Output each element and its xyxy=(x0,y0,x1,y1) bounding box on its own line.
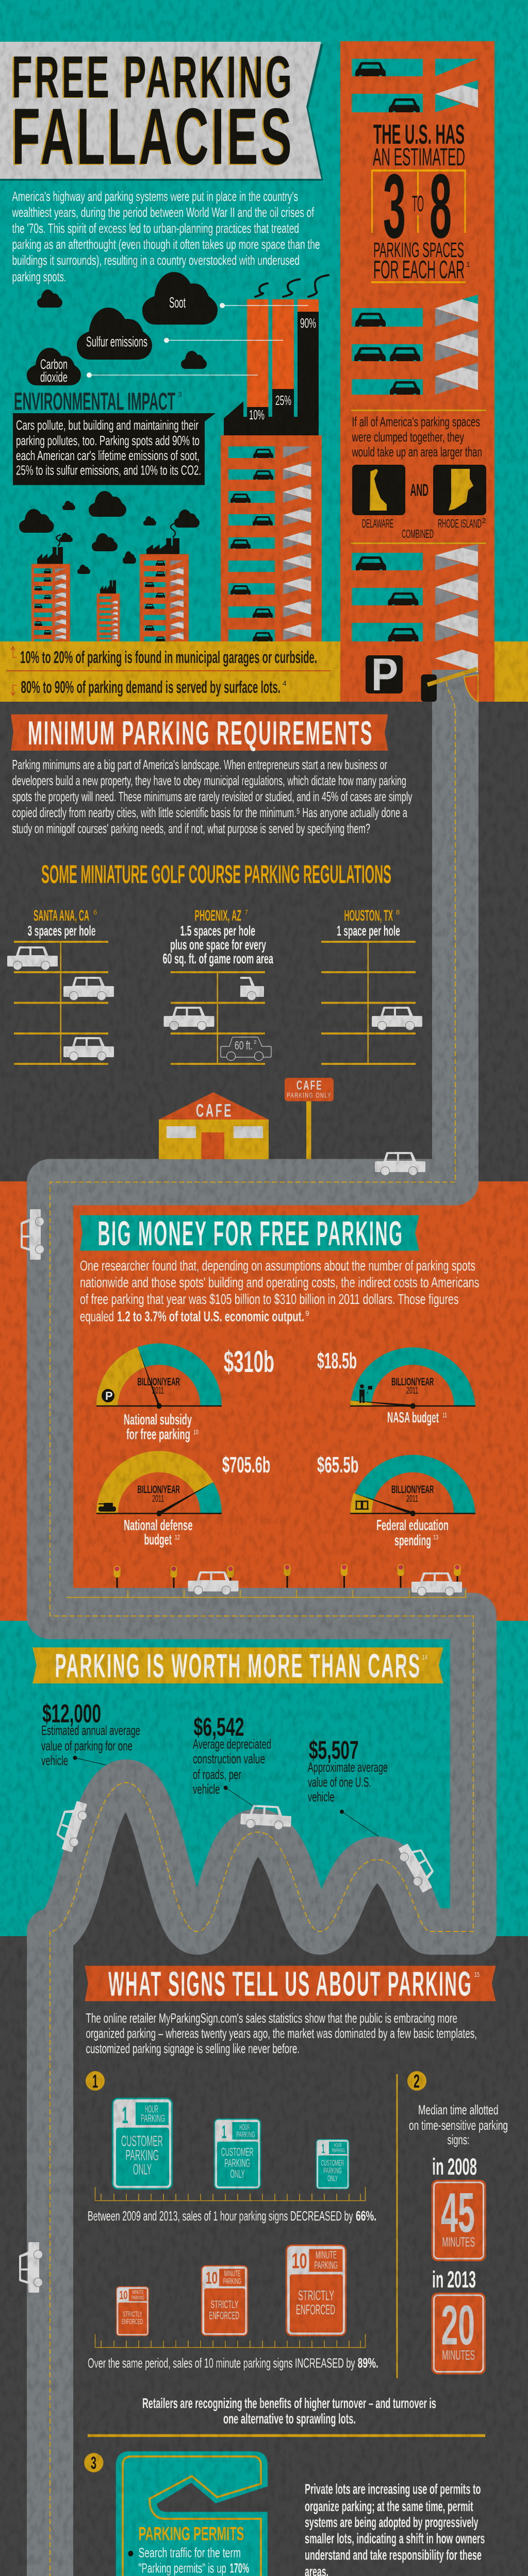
sign: 10 minute medium xyxy=(201,2265,248,2336)
sign: 10 minute large: 10 xyxy=(292,2248,307,2273)
sign: 1 hour medium: PARKING xyxy=(236,2130,255,2139)
gauge: national subsidy for free parking: for free parking xyxy=(126,1426,190,1443)
sign: 10 minute large xyxy=(286,2244,346,2336)
sign: 10 minute medium: ENFORCED xyxy=(209,2310,239,2321)
sign: 1 hour small: PARKING xyxy=(332,2148,345,2154)
panel: Phoenix regulation: 1.5 spaces per hole xyxy=(180,923,255,939)
stack: soot 90% xyxy=(298,299,319,435)
sign: 10 minute small: MINUTE xyxy=(132,2290,144,2296)
panel: Phoenix regulation: plus one space for every xyxy=(170,937,266,953)
sign: 1 hour small: 1 xyxy=(321,2142,325,2156)
heading: environmental impact xyxy=(14,388,182,415)
number badge 3 xyxy=(84,2453,103,2473)
text: state labels: AND xyxy=(410,480,428,500)
text: state labels: RHODE ISLAND xyxy=(438,517,482,530)
sign: 10 minute large: ENFORCED xyxy=(296,2302,335,2317)
cloud: carbon dioxide: Carbon xyxy=(40,357,68,372)
icon: outlined car 60 sq ft: 2 xyxy=(254,1040,257,1045)
illustration: cafe xyxy=(159,1078,334,1159)
number badge 1: 1 xyxy=(92,2071,98,2092)
text: area comparison xyxy=(352,414,482,460)
stat: 3 to 8 parking spaces: 8 xyxy=(430,155,452,257)
gauge: NASA budget: $18.5b xyxy=(317,1348,357,1374)
text: 1 hour signs decreased: 66%. xyxy=(356,2208,376,2224)
panel: large parking tower with stat xyxy=(340,41,494,702)
parking gate xyxy=(421,650,478,702)
title banner: FREE PARKING xyxy=(12,44,294,110)
text: 10 minute signs increased: 89%. xyxy=(358,2355,378,2371)
text: big money xyxy=(80,1258,480,1324)
text: big money: 9 xyxy=(305,1309,309,1317)
panel: parking permits hang tag: Search traffic for the term xyxy=(138,2545,241,2561)
sign: 1 hour small: ONLY xyxy=(327,2175,338,2183)
clouds with labels xyxy=(19,272,308,574)
gauge: national subsidy for free parking: 2011 xyxy=(152,1385,164,1396)
text: state labels: 2 xyxy=(482,517,486,524)
gauge: NASA budget: NASA budget xyxy=(387,1410,439,1426)
sign: 1 hour large: HOUR xyxy=(145,2104,158,2115)
sign: 1 hour large: 1 xyxy=(122,2102,128,2128)
panel: parking permits hang tag xyxy=(116,2451,268,2576)
icon: book xyxy=(355,1501,369,1509)
panel: Houston regulation: 8 xyxy=(396,908,400,916)
icon: car driving on left road xyxy=(21,1209,44,1260)
lot lines xyxy=(67,1590,467,1597)
sign: 45 minutes: MINUTES xyxy=(442,2234,475,2249)
gauge: federal education spending: 13 xyxy=(433,1533,438,1541)
sign: 1 hour medium: 1 xyxy=(222,2122,226,2142)
number badge 2: 2 xyxy=(414,2071,420,2092)
parking grid xyxy=(171,971,265,1065)
sign: 10 minute small: 10 xyxy=(119,2289,128,2302)
leader lines xyxy=(87,303,308,378)
stat: road value: Average depreciated xyxy=(193,1736,271,1752)
divider column xyxy=(396,2074,398,2378)
gauge: national subsidy for free parking: $310b xyxy=(224,1345,274,1379)
text: parking minimums xyxy=(12,757,412,836)
divider xyxy=(351,410,486,411)
gauge: NASA budget: 11 xyxy=(442,1411,447,1419)
heading: environmental impact: ENVIRONMENTAL IMPACT xyxy=(14,388,175,415)
icon: parking xyxy=(102,1389,114,1402)
gauge: federal education spending: Federal education xyxy=(376,1517,449,1534)
stat: 3 to 8 parking spaces: 1 xyxy=(466,260,470,268)
sign: 10 minute medium: 10 xyxy=(206,2268,218,2287)
panel: Houston regulation: HOUSTON, TX xyxy=(344,907,393,924)
cafe sign xyxy=(285,1078,334,1159)
gauge: national defense budget: 2011 xyxy=(152,1494,164,1504)
icon: down arrow xyxy=(11,685,17,696)
icon: car xyxy=(164,1007,214,1030)
windows xyxy=(352,59,478,641)
sign: 1 hour medium: CUSTOMER xyxy=(221,2146,254,2159)
sign: 1 hour large: PARKING xyxy=(141,2113,165,2125)
sign: 10 minute large: STRICTLY xyxy=(298,2287,334,2303)
gauge: federal education spending: BILLION/YEAR xyxy=(391,1484,434,1496)
title banner: FALLACIES xyxy=(10,93,293,182)
chart: environmental impact smokestacks xyxy=(224,275,328,435)
panel: Santa Ana regulation: SANTA ANA, CA xyxy=(34,907,89,924)
gauge: national defense budget: budget xyxy=(144,1532,172,1548)
sign: 10 minute medium: MINUTE xyxy=(224,2269,240,2278)
sign: 1 hour small: PARKING xyxy=(323,2166,342,2175)
sign: 1 hour small xyxy=(316,2139,350,2189)
icon: car on road xyxy=(375,1152,425,1176)
text: 10 minute signs increased: Over the same period, sales of 10 minute parking signs INCREASED by xyxy=(88,2355,355,2371)
number badge 2 xyxy=(407,2071,426,2092)
icon: astronaut xyxy=(359,1384,372,1403)
parking grid xyxy=(321,941,416,1065)
street with parking meters xyxy=(67,1564,467,1597)
stat: annual parking value: $12,000 xyxy=(42,1699,101,1728)
gauge: NASA budget: BILLION/YEAR xyxy=(391,1376,434,1388)
panel: Houston regulation: 1 space per hole xyxy=(337,923,400,939)
stat: annual parking value xyxy=(41,1699,140,1768)
gauge: federal education spending: spending xyxy=(394,1532,431,1549)
title banner: FALLACIES xyxy=(12,92,294,181)
text: area comparison: were clumped together, they xyxy=(352,429,464,445)
stat: vehicle value: $5,507 xyxy=(309,1736,359,1765)
stat: vehicle value: Approximate average xyxy=(308,1759,388,1775)
sign: 45 minutes: 45 xyxy=(441,2181,475,2244)
cloud: sulfur emissions: Sulfur emissions xyxy=(86,334,147,349)
sign: 1 hour small: HOUR xyxy=(334,2143,341,2149)
gauge: NASA budget xyxy=(317,1347,475,1426)
text box: environmental impact: each American car's lifetime emissions of soot, xyxy=(16,448,200,463)
gauge: national subsidy for free parking: BILLION/YEAR xyxy=(137,1376,180,1388)
text: 1 hour signs decreased: Between 2009 and 2013, sales of 1 hour parking signs DECREASED by xyxy=(88,2208,353,2224)
icon: smoke wisps xyxy=(255,275,328,297)
panel: median time allotted: signs: xyxy=(448,2132,469,2147)
stat: annual parking value: value of parking for one xyxy=(41,1738,133,1754)
icon: P sign: P xyxy=(371,649,398,700)
panel: Phoenix regulation xyxy=(163,907,273,1065)
yellow band stats: 4 xyxy=(283,679,287,687)
stack: soot 90%: 90% xyxy=(300,315,316,331)
text: state labels xyxy=(362,480,486,540)
number badge 3: 3 xyxy=(91,2453,96,2473)
panel: parking permits hang tag: PARKING PERMITS xyxy=(138,2523,244,2544)
text box: environmental impact: parking pollutes, too. Parking spots add 90% to xyxy=(16,433,200,448)
cloud: carbon dioxide xyxy=(27,348,81,385)
intro text: wealthiest years, during the period between World War II and the oil crises of xyxy=(12,205,315,220)
gauge: federal education spending: 2011 xyxy=(406,1494,418,1504)
stat: road value: $6,542 xyxy=(194,1713,244,1741)
stack: carbon dioxide 10% xyxy=(247,299,268,422)
sign: 1 hour medium: ONLY xyxy=(230,2167,244,2180)
panel: Santa Ana regulation: 6 xyxy=(93,908,97,916)
small clouds xyxy=(19,290,207,574)
gauge: national defense budget: National defense xyxy=(124,1517,193,1534)
text: big money: equaled xyxy=(80,1309,114,1324)
text: 1 hour signs decreased xyxy=(88,2208,376,2224)
stat: 3 to 8 parking spaces xyxy=(371,119,470,284)
icon: parking: P xyxy=(105,1389,113,1402)
gauge: federal education spending xyxy=(317,1452,475,1549)
yellow band stats xyxy=(0,641,340,702)
text: state labels: DELAWARE xyxy=(362,517,393,530)
cafe sign: CAFE xyxy=(296,1078,323,1093)
text: signs intro xyxy=(86,2010,477,2056)
ruler one xyxy=(95,2187,365,2201)
sign: 1 hour large xyxy=(112,2098,173,2190)
panel: Santa Ana regulation xyxy=(7,907,114,1065)
icon: car xyxy=(372,1007,422,1030)
sign: 20 minutes xyxy=(432,2293,486,2375)
cloud: sulfur emissions xyxy=(77,308,152,360)
stat: annual parking value: vehicle xyxy=(41,1753,68,1768)
stat: road value: construction value xyxy=(193,1751,265,1766)
bullets xyxy=(128,2551,133,2576)
sign: 1 hour medium xyxy=(214,2119,261,2189)
sign: 20 minutes: 20 xyxy=(441,2294,475,2357)
heading: parking is worth more than cars: 14 xyxy=(422,1653,427,1661)
intro text: parking as an afterthought (even though it often takes up more space than the xyxy=(12,236,320,252)
ruler two xyxy=(95,2334,365,2347)
stack: sulfur 25%: 25% xyxy=(275,393,291,408)
sign: 10 minute medium: STRICTLY xyxy=(211,2299,239,2311)
icon: half car xyxy=(240,977,264,1001)
intro text: America's highway and parking systems were put in place in the country's xyxy=(12,189,298,204)
sign: 1 hour large: CUSTOMER xyxy=(121,2133,163,2150)
text: retailers conclusion xyxy=(142,2395,436,2427)
intro text: the '70s. This spirit of excess led to urban-planning practices that treated xyxy=(12,221,299,236)
sign: 10 minute large: MINUTE xyxy=(316,2250,337,2261)
sign: 1 hour large: ONLY xyxy=(133,2162,152,2178)
illustration: small tower two xyxy=(140,523,189,641)
gauge: national defense budget xyxy=(96,1451,270,1548)
gauge: national subsidy for free parking: 10 xyxy=(193,1428,199,1436)
panel: Phoenix regulation: PHOENIX, AZ xyxy=(195,907,241,924)
gauge: national subsidy for free parking xyxy=(96,1344,274,1443)
panel: Houston regulation xyxy=(321,907,422,1065)
cloud: soot xyxy=(142,272,218,325)
stat: annual parking value: Estimated annual average xyxy=(41,1723,140,1738)
hills: dark fill under the winding road xyxy=(50,1783,431,1937)
sign: 10 minute small: ENFORCED xyxy=(122,2318,143,2326)
panel: median time allotted xyxy=(407,2071,508,2375)
stat: road value xyxy=(193,1713,271,1807)
icon: outlined car 60 sq ft xyxy=(221,1037,271,1060)
panel: parking permits hang tag: 170% xyxy=(230,2561,249,2576)
text: signs intro: customized parking signage is selling like never before. xyxy=(86,2041,300,2056)
panel: Phoenix regulation: 60 sq. ft. of game room area xyxy=(163,951,273,967)
cloud: carbon dioxide: dioxide xyxy=(40,369,68,385)
stack: carbon dioxide 10%: 10% xyxy=(249,407,265,422)
text: big money: 1.2 to 3.7% of total U.S. economic output. xyxy=(117,1309,304,1324)
stat: 3 to 8 parking spaces: 3 xyxy=(383,155,406,257)
yellow band stats: 80% to 90% of parking demand is served by surface lots. xyxy=(21,677,280,697)
sign: 10 minute small: STRICTLY xyxy=(123,2310,142,2318)
icon: Delaware xyxy=(352,465,405,515)
sign: 1 hour medium: PARKING xyxy=(224,2157,250,2170)
panel: parking permits hang tag: "Parking permits" is up xyxy=(138,2561,226,2576)
gauge: national defense budget: BILLION/YEAR xyxy=(137,1484,180,1496)
sign: 10 minute large: PARKING xyxy=(315,2260,338,2271)
icon: cars xyxy=(7,946,114,1060)
sign: 1 hour medium: HOUR xyxy=(239,2123,250,2132)
stack: sulfur 25% xyxy=(272,299,294,417)
gauge: NASA budget: 2011 xyxy=(406,1385,418,1396)
sign: 1 hour large: PARKING xyxy=(126,2147,159,2164)
panel: Santa Ana regulation: 3 spaces per hole xyxy=(28,923,96,939)
stat: vehicle value xyxy=(308,1736,388,1837)
icon: up arrow xyxy=(11,647,17,657)
icon: outlined car 60 sq ft: 60 ft. xyxy=(235,1039,253,1052)
stat: vehicle value: value of one U.S. xyxy=(308,1774,371,1790)
title banner xyxy=(0,42,323,182)
illustration: mid parking tower xyxy=(221,435,322,641)
icon: car on road xyxy=(19,2242,42,2293)
cafe building xyxy=(159,1092,269,1159)
heading: environmental impact: 3 xyxy=(178,390,182,398)
illustration: small tower three xyxy=(31,535,70,641)
sign: 20 minutes: MINUTES xyxy=(442,2347,475,2363)
gauge: national defense budget: $705.6b xyxy=(222,1452,270,1478)
stat: vehicle value: vehicle xyxy=(308,1789,334,1804)
text: retailers conclusion: one alternative to sprawling lots. xyxy=(223,2411,356,2427)
cars in windows xyxy=(354,62,420,641)
sign: 1 hour small: CUSTOMER xyxy=(321,2159,344,2167)
parking grid xyxy=(14,941,108,1065)
intro text: buildings it surrounds), resulting in a country overstocked with underused xyxy=(12,252,300,268)
intro text xyxy=(12,189,320,284)
road running down the page xyxy=(0,670,473,2576)
cafe sign: PARKING ONLY xyxy=(287,1091,332,1099)
illustration: small tower four xyxy=(97,580,120,641)
parking meters xyxy=(113,1564,461,1588)
heading: what signs tell us: 15 xyxy=(474,1971,480,1978)
panel: Phoenix regulation: 7 xyxy=(244,908,248,916)
ramps xyxy=(435,80,478,641)
panel: median time allotted: in 2008 xyxy=(432,2154,477,2180)
stat: 3 to 8 parking spaces: TO xyxy=(412,191,424,216)
sign: 45 minutes xyxy=(432,2180,486,2261)
text box: environmental impact xyxy=(13,413,216,485)
number badge 1 xyxy=(86,2071,105,2092)
intro text: parking spots. xyxy=(12,269,66,284)
panel: median time allotted: in 2013 xyxy=(432,2266,476,2293)
icon: tank xyxy=(98,1503,116,1512)
sign: 10 minute medium: PARKING xyxy=(223,2277,241,2286)
gauge: national subsidy for free parking: National subsidy xyxy=(124,1412,192,1428)
gauge: federal education spending: $65.5b xyxy=(317,1452,359,1478)
gauge: national defense budget: 12 xyxy=(175,1533,180,1541)
text box: environmental impact: Cars pollute, but building and maintaining their xyxy=(16,417,199,433)
smokestack base xyxy=(224,401,319,435)
title banner: FREE PARKING xyxy=(10,45,293,111)
text: state labels: COMBINED xyxy=(402,527,434,540)
icon: Rhode Island xyxy=(433,465,486,515)
icon: parked cars xyxy=(188,1571,462,1596)
stat: road value: vehicle xyxy=(193,1782,220,1797)
heading: minimum parking requirements xyxy=(11,714,388,752)
stat: road value: of roads, per xyxy=(193,1767,241,1782)
text: private lots xyxy=(305,2481,485,2576)
cafe building: CAFE xyxy=(196,1100,233,1121)
icon: cars on hills xyxy=(53,1798,440,1894)
sign: 10 minute small xyxy=(116,2286,149,2336)
text: 10 minute signs increased xyxy=(88,2355,378,2371)
sign: 10 minute small: PARKING xyxy=(131,2295,144,2301)
cloud: soot: Soot xyxy=(169,295,186,311)
text box: environmental impact: 25% to its sulfur emissions, and 10% to its CO2. xyxy=(16,463,201,478)
